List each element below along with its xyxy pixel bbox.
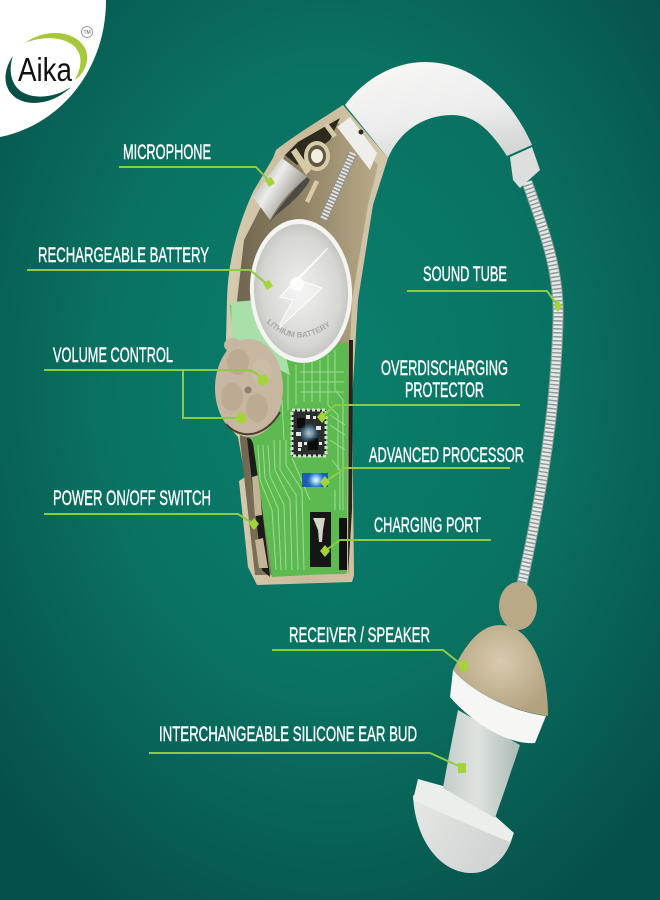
hook socket [337,117,377,170]
ear hook [345,62,540,188]
lightning bolt [277,248,328,330]
leader lines [27,167,558,767]
label: volume control: VOLUME CONTROL [53,344,173,367]
label: microphone: MICROPHONE [123,141,211,164]
hook collar [510,147,540,188]
dark strip left [247,438,270,577]
volume wheel [215,338,283,437]
sound tube [521,182,558,588]
microphone cylinder [253,158,310,222]
side switch [252,475,268,568]
label: advanced processor: ADVANCED PROCESSOR [369,444,524,467]
label: charging port: CHARGING PORT [374,514,481,537]
pale board section [231,300,290,375]
logo white corner [0,0,106,137]
label: receiver speaker: RECEIVER / SPEAKER [289,624,430,647]
label: overdischarging protector [381,357,508,402]
silicone stem [443,710,520,818]
charging port [310,512,331,567]
label: overdischarging protector: OVERDISCHARGING [381,357,508,380]
logo name: Aika [18,51,73,88]
hearing aid body [215,105,388,585]
receiver dome [453,625,548,716]
marker dots [236,177,562,773]
shell [226,105,388,585]
white band [450,670,546,743]
advanced processor chip [302,471,328,489]
label: ear bud: INTERCHANGEABLE SILICONE EAR BUD [159,723,417,746]
dome ear tip [413,779,514,873]
bead [499,582,537,630]
internal ribs [291,123,337,203]
label: rechargeable battery: RECHARGEABLE BATTERY [38,244,209,267]
circuit board [230,300,348,577]
battery [250,219,352,363]
label: sound tube: SOUND TUBE [423,263,507,286]
charging connector [339,518,347,570]
processor chip [292,410,326,456]
receiver and ear bud [413,582,548,873]
label: overdischarging protector: PROTECTOR [405,379,484,402]
microphone ring [304,141,330,171]
internal spring [323,153,353,220]
label: power switch: POWER ON/OFF SWITCH [53,487,211,510]
logo dark arc [5,56,71,103]
battery engraving: LITHIUM BATTERY [266,318,329,338]
dark strip right [348,340,353,575]
logo lime arc [25,33,87,80]
logo trademark: TM [84,30,91,36]
dark cavity [285,118,340,165]
shell interior [236,122,378,575]
logo [0,0,106,137]
